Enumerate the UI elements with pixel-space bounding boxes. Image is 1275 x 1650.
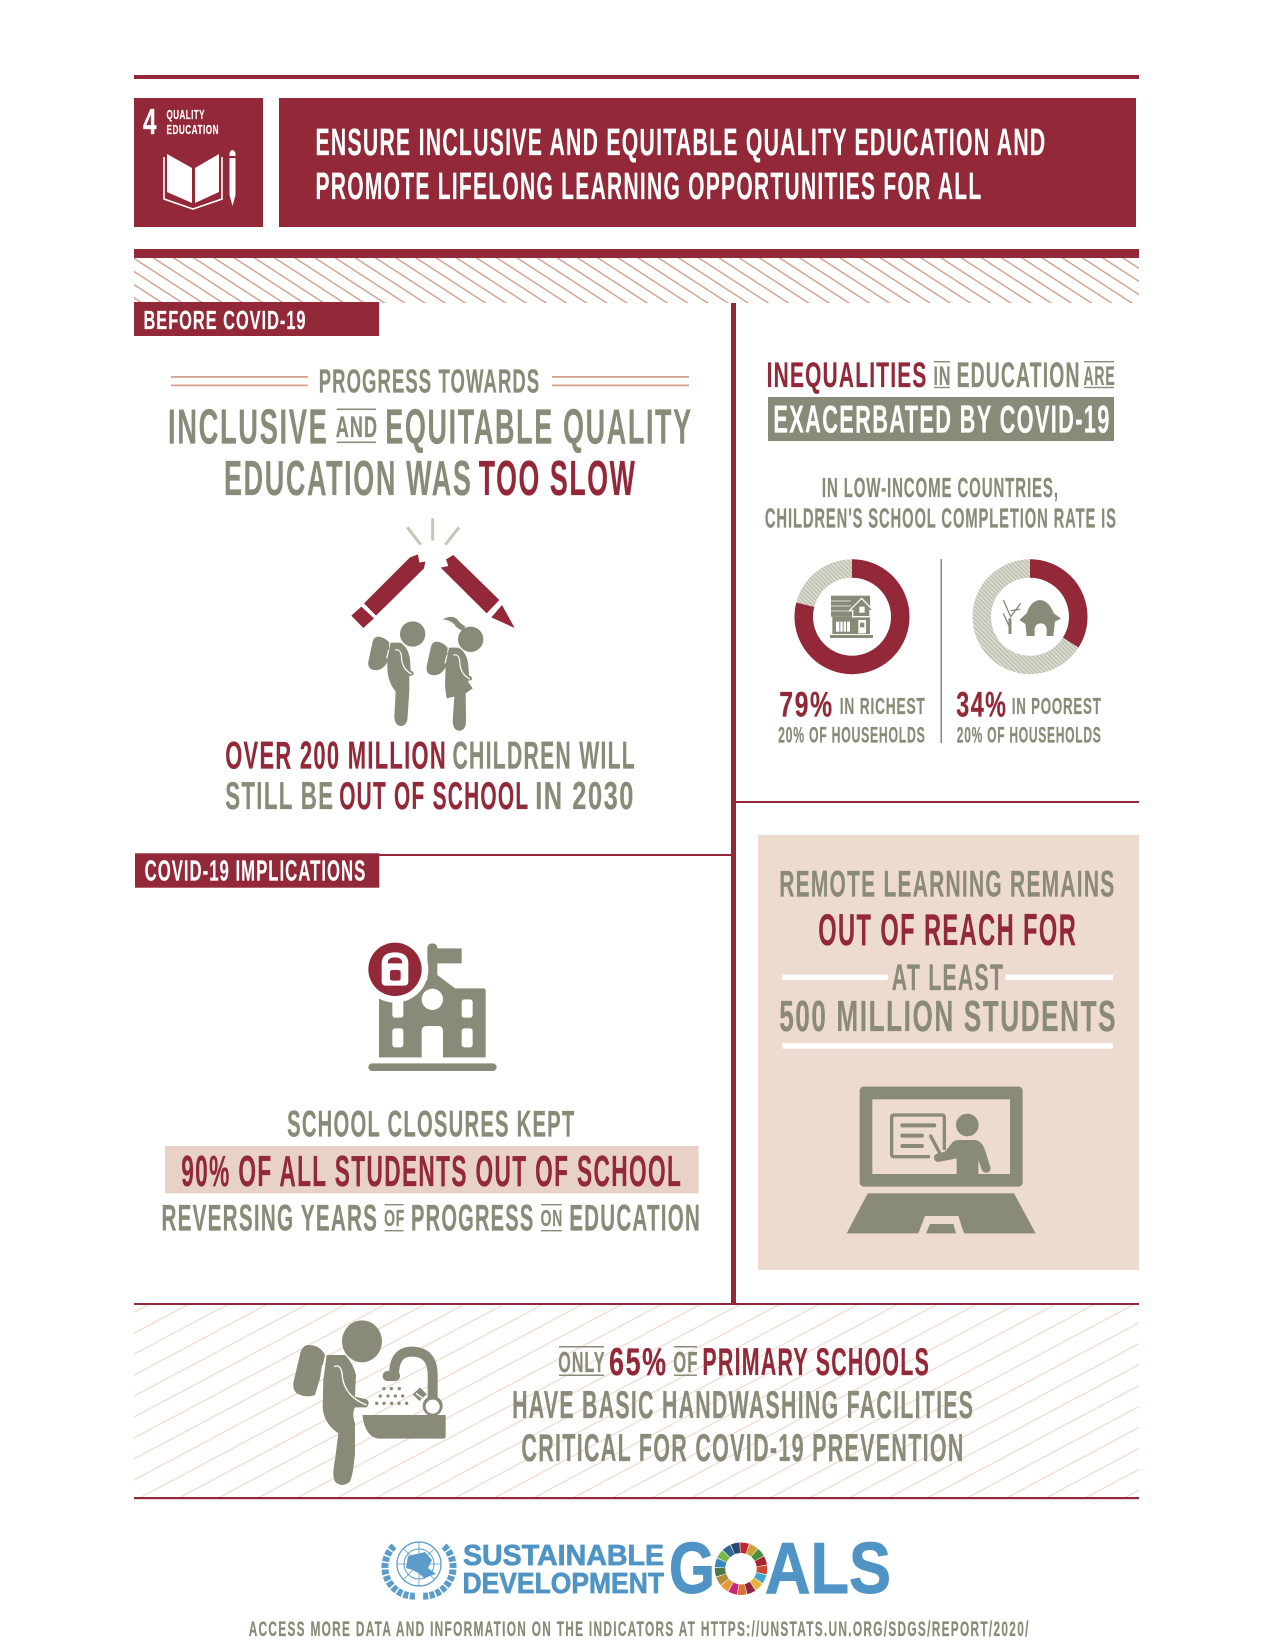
stat: 200 million children: STILL BE <box>225 775 334 818</box>
SDG 4 badge: QUALITY <box>166 107 205 122</box>
heading: progress towards: EDUCATION WAS <box>224 451 472 506</box>
heading: progress towards: EQUITABLE QUALITY <box>385 399 693 454</box>
section tag: before covid-19: BEFORE COVID-19 <box>144 305 306 335</box>
top rule <box>134 75 1139 79</box>
title banner <box>279 98 1136 227</box>
logo: sustainable development goals: G <box>669 1529 715 1609</box>
text: handwashing stat: ONLY <box>558 1347 606 1379</box>
heading: inequalities <box>767 356 1116 442</box>
icon: broken pencil roof over two children <box>351 518 515 731</box>
icon: locked school <box>362 936 497 1071</box>
heading: inequalities: IN <box>934 361 952 391</box>
panel: remote learning <box>758 835 1139 1270</box>
heading: progress towards: INCLUSIVE <box>168 399 328 454</box>
heading: progress towards <box>168 363 693 506</box>
divider <box>940 559 942 743</box>
stat: richest households <box>778 686 926 748</box>
text: completion rate intro: IN LOW-INCOME COUNTRIES, <box>822 472 1059 503</box>
heading: inequalities: INEQUALITIES <box>767 356 928 395</box>
panel: remote learning: AT LEAST <box>892 956 1004 998</box>
text: handwashing stat: OF <box>673 1347 698 1379</box>
logo: sustainable development goals: ALS <box>765 1529 891 1609</box>
text: handwashing stat: PRIMARY SCHOOLS <box>702 1341 930 1384</box>
stat: poorest households <box>956 686 1102 748</box>
SDG 4 badge <box>134 98 263 227</box>
stat: poorest households: IN POOREST <box>1012 693 1102 719</box>
SDG 4 badge: EDUCATION <box>166 122 219 137</box>
icon: house <box>830 596 873 638</box>
hatched divider band <box>134 249 1139 303</box>
SDG 4 badge: 4 <box>143 101 158 142</box>
stat: school closures: EDUCATION <box>569 1197 701 1239</box>
stat: 200 million children: CHILDREN WILL <box>452 734 636 777</box>
stat: 200 million children <box>225 734 636 818</box>
logo: sustainable development goals: SUSTAINABLE <box>463 1540 664 1572</box>
text: handwashing stat <box>512 1341 974 1470</box>
donut chart: poorest 34% <box>982 568 1078 665</box>
stat: school closures: ON <box>541 1205 563 1231</box>
stat: school closures <box>162 1103 701 1239</box>
section tag: covid-19 implications <box>135 853 379 888</box>
logo: sustainable development goals <box>462 1529 891 1609</box>
donut chart: richest 79% <box>804 568 900 665</box>
text: completion rate intro <box>765 472 1117 534</box>
logo: UN emblem <box>385 1542 453 1596</box>
icon: SDG colour wheel <box>711 1539 771 1598</box>
stat: poorest households: 20% OF HOUSEHOLDS <box>957 723 1102 748</box>
heading: inequalities: EDUCATION <box>957 356 1081 395</box>
stat: richest households: 20% OF HOUSEHOLDS <box>778 723 926 748</box>
panel: handwashing band <box>134 1303 1139 1499</box>
heading: progress towards: TOO SLOW <box>479 451 636 506</box>
stat: school closures: REVERSING YEARS <box>162 1197 378 1239</box>
stat: richest households: 79% <box>779 686 834 725</box>
heading: progress towards: PROGRESS TOWARDS <box>319 363 540 400</box>
layout rules <box>135 303 1139 1304</box>
stat: 200 million children: IN 2030 <box>535 775 635 818</box>
stat: school closures: PROGRESS <box>411 1197 534 1239</box>
heading: progress towards: AND <box>336 411 378 444</box>
stat: school closures: 90% OF ALL STUDENTS OUT OF SCHOOL <box>181 1148 682 1196</box>
logo: sustainable development goals: DEVELOPMENT <box>462 1568 664 1600</box>
heading: inequalities: ARE <box>1084 361 1116 391</box>
stat: richest households: IN RICHEST <box>840 693 926 719</box>
icon: laptop with teacher <box>847 1087 1036 1233</box>
text: handwashing stat: 65% <box>609 1341 668 1384</box>
icon: open book and pencil <box>164 150 236 209</box>
stat: 200 million children: OUT OF SCHOOL <box>339 775 529 818</box>
stat: school closures: SCHOOL CLOSURES KEPT <box>287 1103 576 1145</box>
icon: hut and bare tree <box>1003 600 1061 636</box>
icon: child washing hands <box>293 1320 446 1485</box>
section tag: covid-19 implications: COVID-19 IMPLICATIONS <box>145 856 366 888</box>
stat: poorest households: 34% <box>956 686 1007 725</box>
stat: 200 million children: OVER 200 MILLION <box>225 734 447 777</box>
stat: school closures: OF <box>384 1205 405 1231</box>
